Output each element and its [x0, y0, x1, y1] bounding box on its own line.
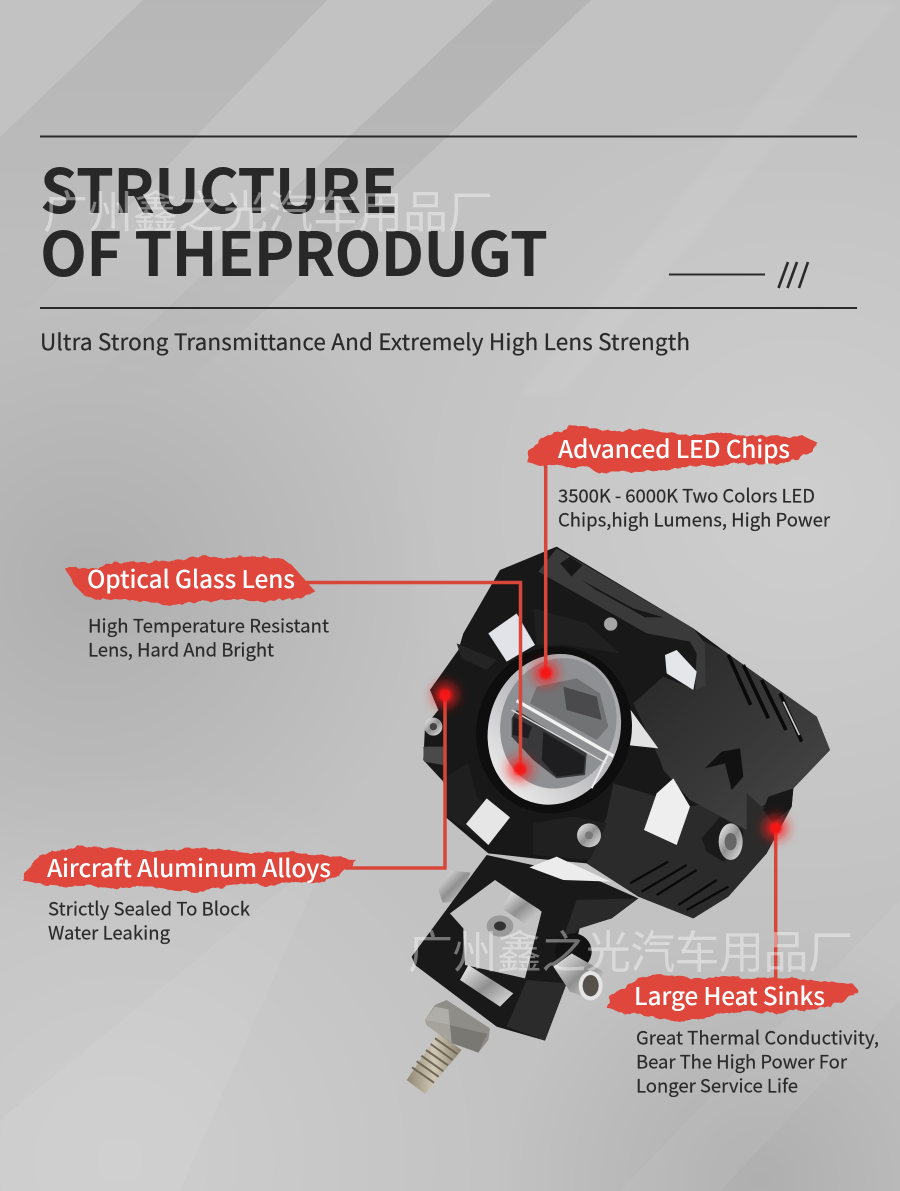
- thread: [407, 1033, 462, 1094]
- watermark: bottom: 广州鑫之光汽车用品厂: [408, 916, 853, 981]
- callout: aircraft aluminum alloys: Strictly Sealed To Block: [48, 896, 251, 922]
- callout: optical glass lens: High Temperature Resistant: [88, 612, 329, 638]
- rear bolt: [438, 871, 471, 903]
- cooling slots lower: [630, 862, 728, 910]
- second rule: [40, 307, 857, 309]
- inner nut: [460, 965, 513, 1007]
- top visor: [538, 548, 706, 690]
- callout: advanced LED chips: Chips,high Lumens, High Power: [558, 506, 831, 532]
- inner spacer: [502, 892, 540, 925]
- product: LED motorcycle spotlight: [407, 547, 830, 1094]
- light windows: [488, 613, 535, 662]
- lens divider: [517, 701, 613, 756]
- lamp housing: [423, 547, 830, 918]
- lens glass: [468, 636, 640, 822]
- title: OF THEPRODUGT: [40, 205, 548, 294]
- leader line: large heat sinks: [774, 828, 777, 990]
- callout: optical glass lens: Optical Glass Lens: [87, 561, 295, 596]
- side vent: [763, 788, 793, 823]
- callout: advanced LED chips: Advanced LED Chips: [558, 431, 790, 466]
- title: STRUCTURE: [40, 142, 398, 231]
- mounting bracket and bolt: [407, 855, 638, 1094]
- washer and hex nut: [425, 1000, 490, 1053]
- screws: [424, 718, 442, 736]
- decorative line and slashes: [669, 262, 808, 288]
- bracket body: [412, 855, 638, 1041]
- front frame facets: [457, 643, 497, 670]
- top rule: [40, 136, 857, 138]
- full silhouette: [423, 547, 830, 918]
- cooling slots upper: [728, 655, 802, 742]
- lens bezel: [454, 626, 654, 834]
- leader line: optical glass lens: [300, 582, 520, 770]
- callout: large heat sinks: Great Thermal Conductivity,: [636, 1024, 879, 1050]
- leader line: aircraft aluminum alloys: [345, 695, 445, 868]
- lens inner: [483, 643, 633, 804]
- rear cone plate: [633, 640, 830, 830]
- callout: aircraft aluminum alloys: Aircraft Aluminum Alloys: [47, 850, 331, 885]
- leader line: advanced LED chips: [544, 460, 547, 672]
- side bolt collar: [555, 933, 592, 970]
- subtitle: Ultra Strong Transmittance And Extremely High Lens Strength: [40, 325, 690, 357]
- callout: advanced LED chips: [528, 424, 831, 532]
- callout: large heat sinks: Longer Service Life: [636, 1072, 798, 1098]
- callout: large heat sinks: Bear The High Power For: [636, 1048, 848, 1074]
- callout: aircraft aluminum alloys: [22, 846, 356, 946]
- callout: optical glass lens: [66, 556, 329, 662]
- callout: advanced LED chips: 3500K - 6000K Two Colors LED: [558, 482, 815, 508]
- title: [40, 142, 548, 294]
- side bolt: [553, 953, 603, 1000]
- arrow cutout: [705, 748, 743, 790]
- watermark: top: 广州鑫之光汽车用品厂: [43, 176, 493, 241]
- inner screw: [487, 915, 513, 937]
- callout: aircraft aluminum alloys: Water Leaking: [48, 920, 171, 946]
- callout: large heat sinks: Large Heat Sinks: [634, 978, 825, 1013]
- lower body: [587, 783, 792, 918]
- callout: large heat sinks: [606, 975, 879, 1098]
- callout: optical glass lens: Lens, Hard And Bright: [88, 636, 274, 662]
- marker dots: [432, 660, 789, 841]
